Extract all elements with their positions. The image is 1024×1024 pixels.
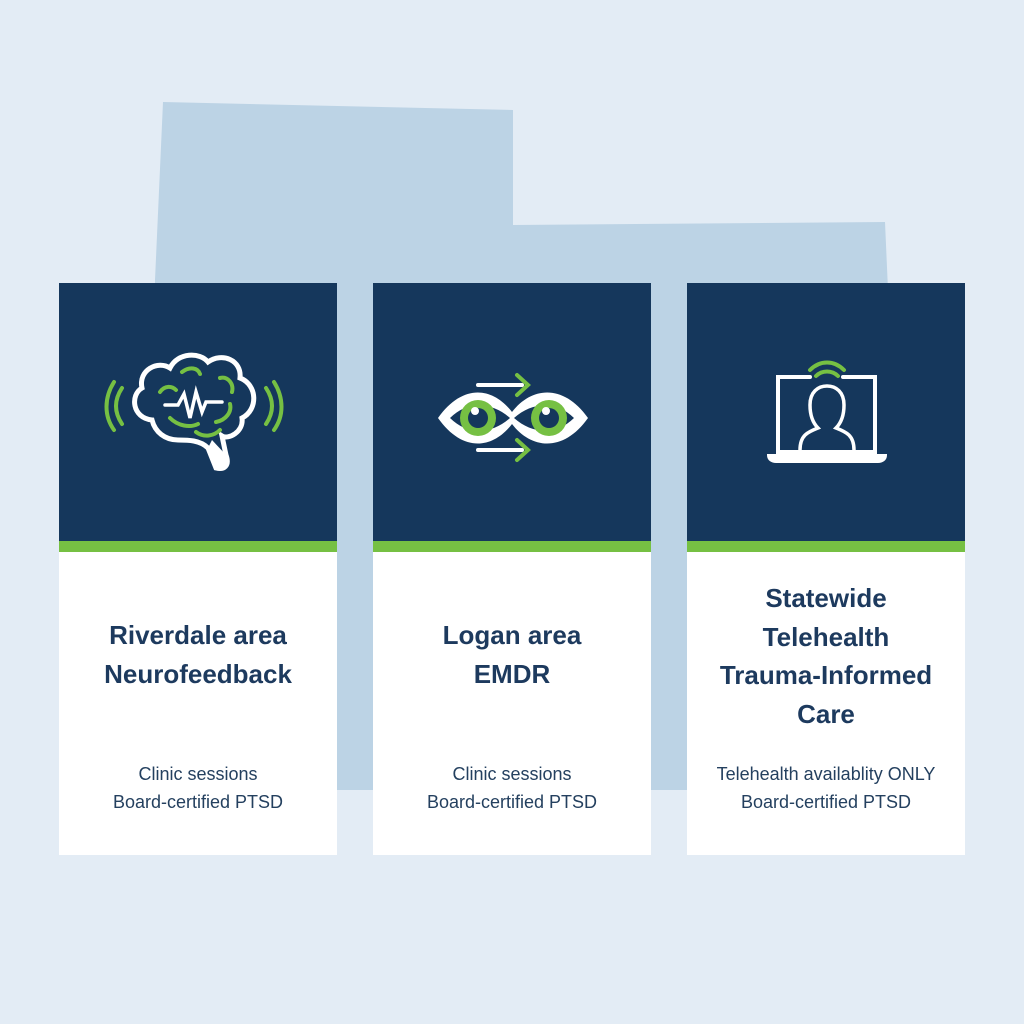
details: [717, 764, 935, 812]
title: EMDR: [474, 658, 550, 688]
details: Telehealth availablity ONLY: [717, 764, 935, 784]
title: [443, 620, 582, 688]
details: Board-certified PTSD: [113, 792, 283, 812]
details: Board-certified PTSD: [427, 792, 597, 812]
icon: brain with waves: [104, 352, 284, 471]
details: [113, 764, 283, 812]
icon: laptop with person: [767, 360, 887, 463]
title: Statewide: [765, 583, 887, 613]
details: [427, 764, 597, 812]
icon: eyes with arrows: [438, 372, 588, 462]
panel: Statewide Telehealth: [687, 283, 965, 855]
panel: Riverdale Neurofeedback: [59, 283, 337, 855]
title: Telehealth: [763, 622, 889, 652]
details: Board-certified PTSD: [741, 792, 911, 812]
details: Clinic sessions: [138, 764, 258, 784]
title: Trauma-Informed: [720, 660, 932, 690]
title: Riverdale area: [109, 620, 287, 650]
details: Clinic sessions: [452, 764, 572, 784]
title: [720, 583, 932, 728]
title: Logan area: [443, 620, 581, 650]
title: [104, 620, 292, 688]
panel: Logan EMDR: [373, 283, 651, 855]
title: Care: [797, 698, 855, 728]
title: Neurofeedback: [104, 658, 292, 688]
